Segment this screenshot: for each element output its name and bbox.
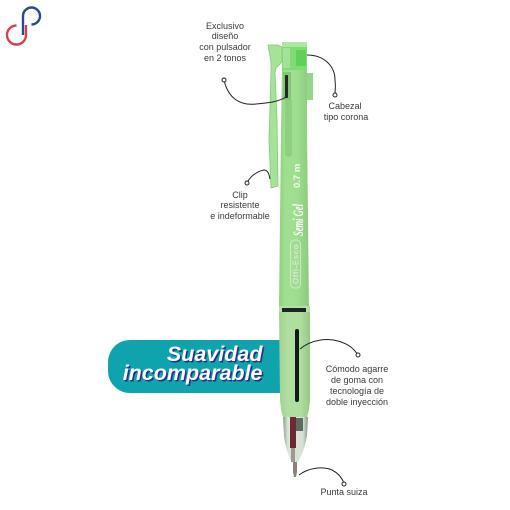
callout text: tecnología de [330,386,384,396]
Offi-Esco badge: Offi-Esco [292,244,300,284]
callout text: Punta suiza [320,487,368,497]
banner text: incomparable [123,361,263,385]
banner text [123,342,263,385]
callout: agarre [300,340,388,407]
recessed groove [285,100,292,157]
callout text: Cómodo agarre [326,364,388,374]
rubber grip [279,312,310,417]
pen upper barrel [279,68,309,308]
callout text: tipo corona [324,112,368,122]
callout text: de goma con [331,375,383,385]
black ring [279,306,310,313]
callout text: con pulsador [199,42,251,52]
icon: brand logo [7,8,40,45]
callout: clip [210,170,270,221]
banner text shadow: Suavidad [168,344,265,368]
metal point [293,462,297,477]
brand text on barrel [290,164,307,288]
pen crown cap [282,42,307,70]
pen illustration [268,42,313,477]
callout text [210,190,270,221]
callout text: resistente [220,200,260,210]
Semi Gel script: Semi Gel [291,204,307,236]
callout text: en 2 tonos [204,53,247,63]
banner text shadow: incomparable [124,362,264,386]
grip slot [295,329,299,402]
banner: Suavidad incomparable [108,340,281,393]
clip side tab [305,73,313,100]
ink refill [290,417,296,448]
callout text: diseño [212,31,238,41]
callout: pulsador [199,21,286,104]
callout text: e indeformable [210,211,270,221]
callout text [324,101,368,122]
callout text: doble inyección [326,397,388,407]
callout text [199,21,251,63]
callout: punta [299,468,368,497]
transparent tip [283,417,308,477]
pen clip [268,45,282,188]
banner text shadow [124,344,265,386]
tip size: 0.7 m [292,164,303,188]
pusher slot [285,75,288,98]
callout text: Clip [232,190,248,200]
banner text: Suavidad [167,342,263,366]
callout: cabezal [307,55,368,122]
callout text: Cabezal [328,101,362,111]
callout text: Exclusivo [206,21,244,31]
callout text [326,364,388,407]
pusher recess [283,72,291,100]
